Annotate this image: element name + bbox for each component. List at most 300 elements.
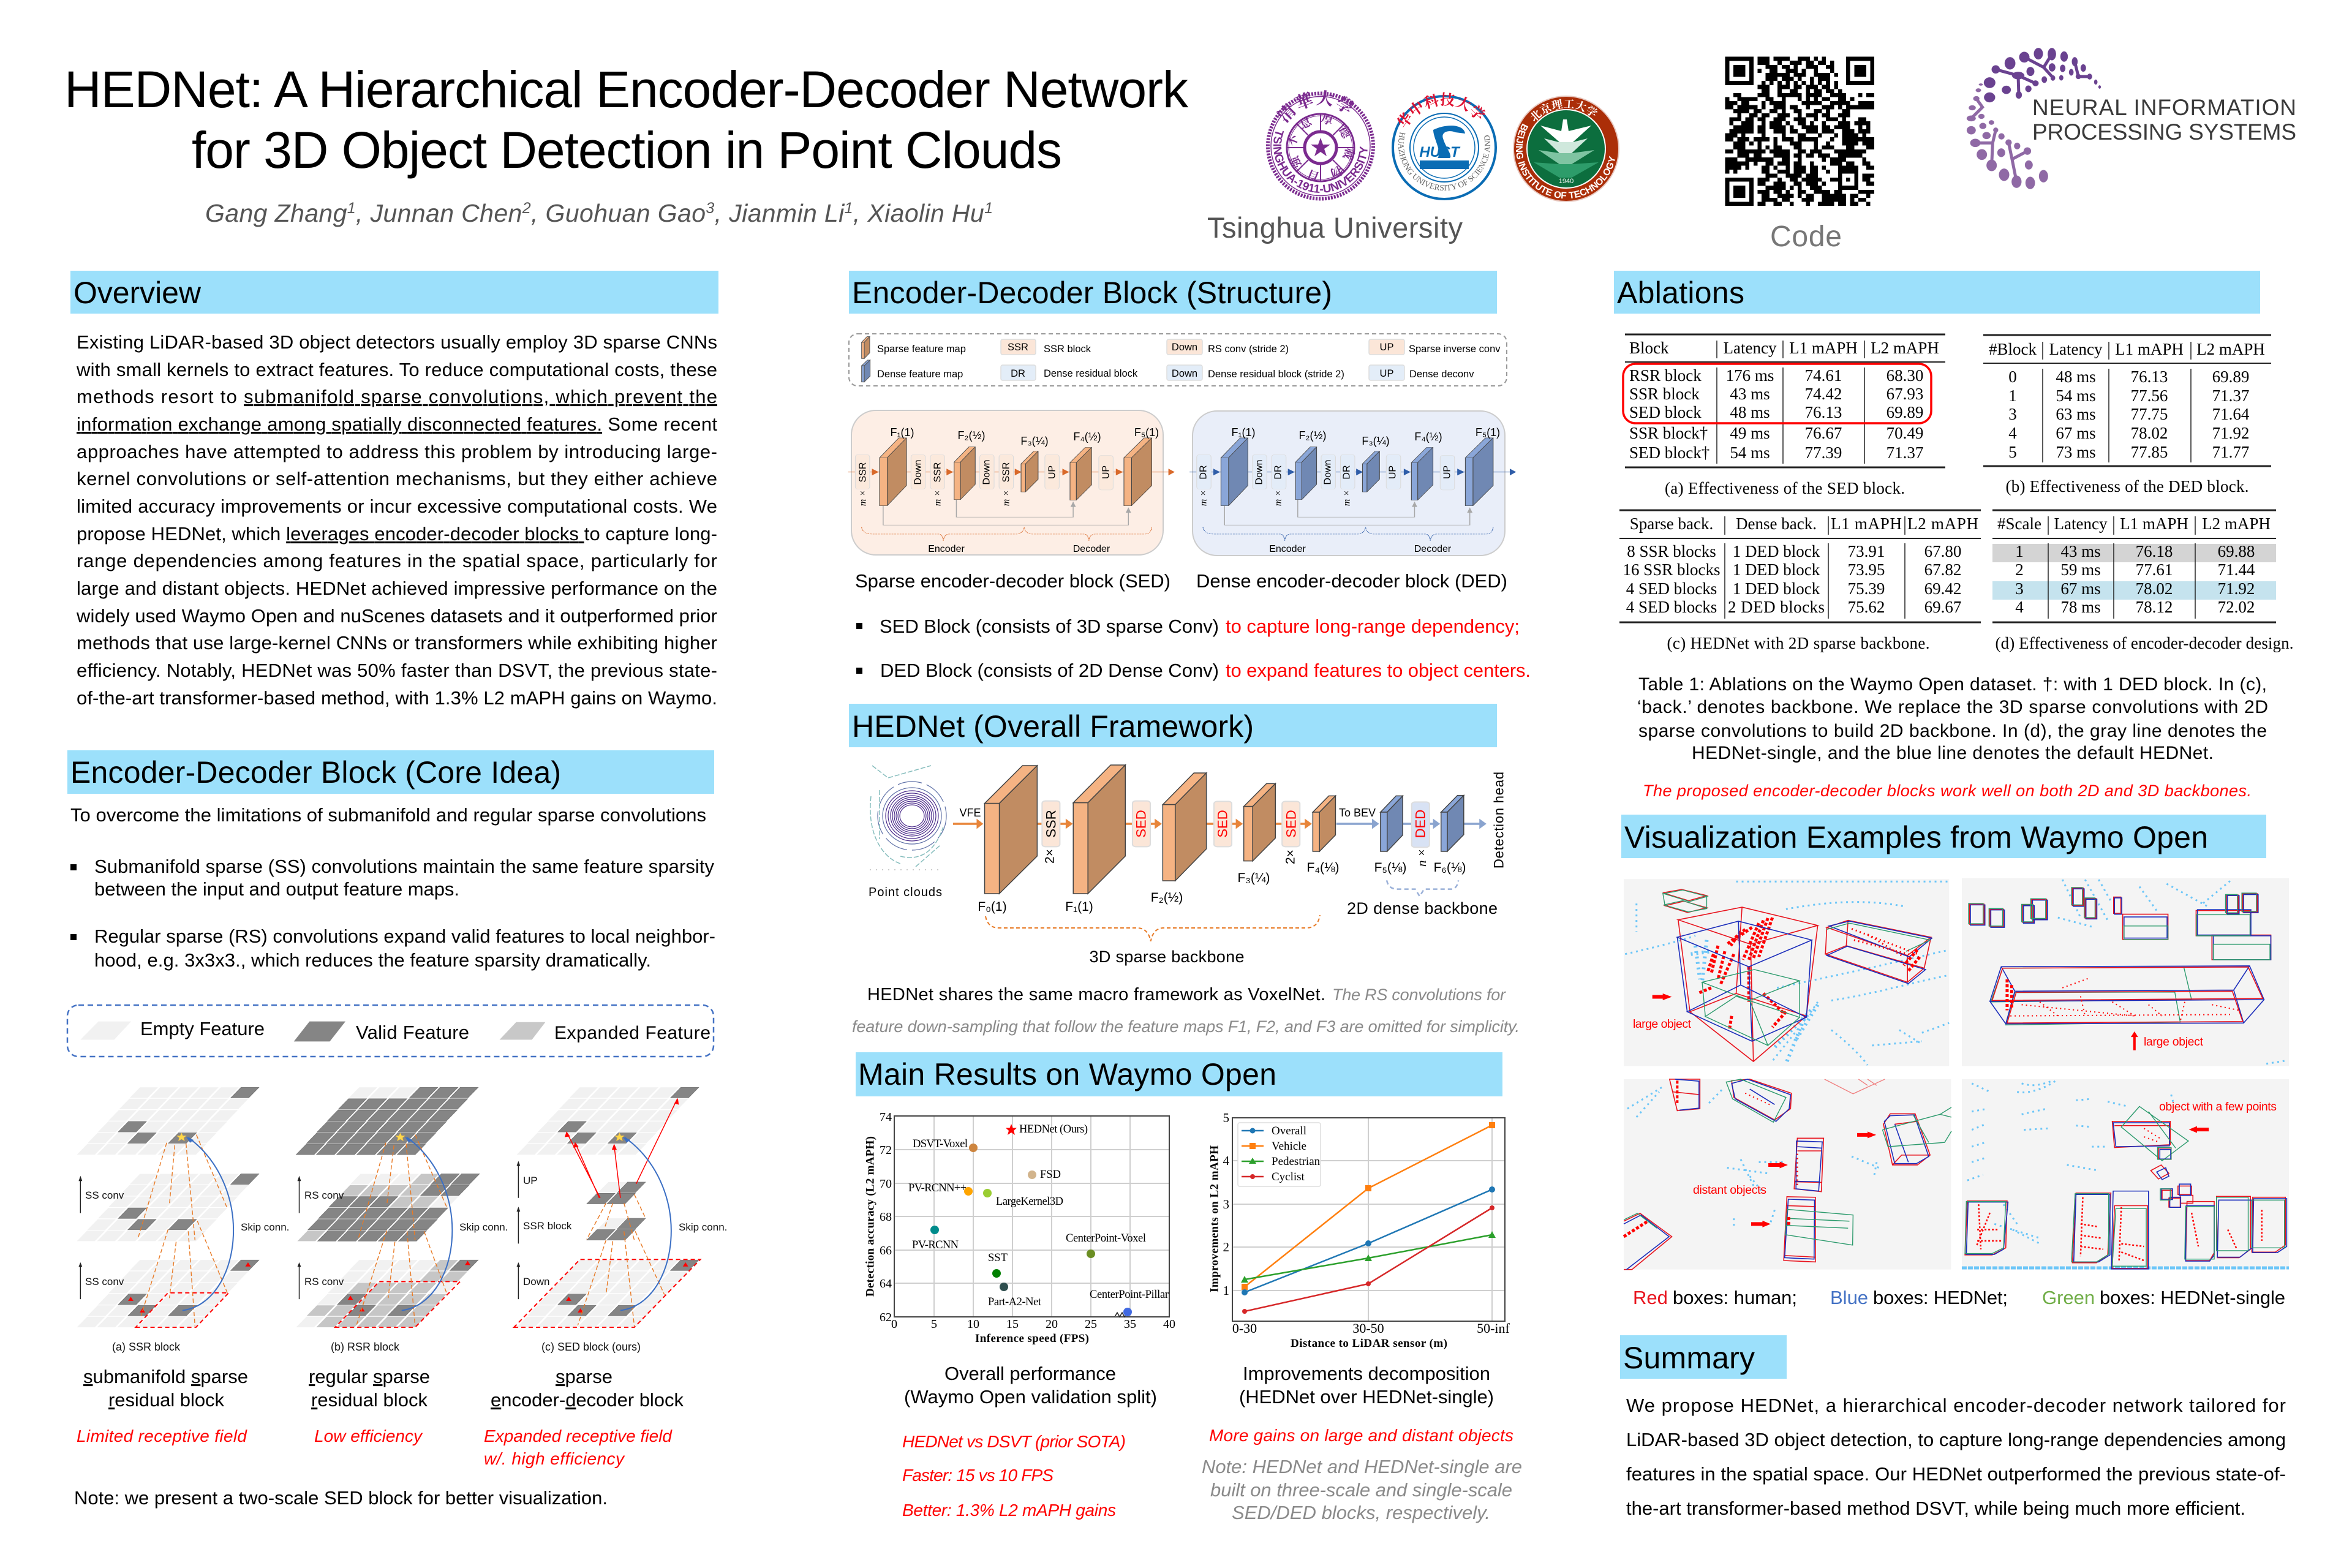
gray note: built on three-scale and single-scale [1210,1479,1512,1501]
pipeline labels: 2D dense backbone [1347,899,1498,918]
framework note: feature down-sampling that follow the feature maps F1, F2, and F3 are omitted for simplicity. [852,1017,1520,1036]
overview body text: efficiency. Notably, HEDNet was 50% faster than DSVT, the previous state- [77,660,717,681]
structure captions [855,570,1507,592]
pipeline labels: SSR [1044,810,1058,838]
table b: DED block: 77.56 [2131,386,2168,405]
chart: improvement by distance: 5 [1223,1110,1229,1125]
chart: accuracy vs speed scatter: 40 [1163,1317,1175,1331]
legend: feature types: Empty Feature [140,1018,265,1039]
logo: Beijing Institute of Technology seal: 1940 [1559,178,1574,185]
diagram: HEDNet pipeline [953,765,1507,966]
logo: HUST seal: 华中科技大学 [1397,92,1486,127]
chart: accuracy vs speed scatter: Part-A2-Net [988,1296,1042,1308]
table d: encoder-decoder design: L2 mAPH [2202,514,2271,533]
table b: DED block: 73 ms [2056,443,2096,461]
panel: main results [856,1052,1522,1523]
diagram labels: (b) RSR block [331,1341,400,1353]
pipeline labels: n × [1414,848,1429,867]
table a: SED block: 74.61 [1805,366,1842,385]
scene annotations: object with a few points [2159,1100,2277,1114]
table b: DED block: 71.37 [2212,386,2249,405]
table c: 2D sparse backbone: 73.91 [1848,542,1885,560]
table d: encoder-decoder design: 72.02 [2218,598,2255,616]
chart: accuracy vs speed scatter: 0 [891,1317,897,1331]
block verdicts [77,1427,673,1468]
table d: encoder-decoder design: 77.61 [2136,560,2173,579]
table d: encoder-decoder design: 76.18 [2136,542,2173,560]
table b: DED block: 69.89 [2212,368,2249,386]
chart: accuracy vs speed scatter: CenterPoint-Voxel [1066,1232,1146,1245]
diagram labels: RS conv [304,1276,344,1287]
gray note: SED/DED blocks, respectively. [1232,1502,1490,1523]
chart: accuracy vs speed scatter: 68 [880,1210,892,1224]
table c: 2D sparse backbone: (c) HEDNet with 2D sparse backbone. [1667,634,1929,652]
table caption: sparse convolutions to build 2D backbone. In (d), the gray line denotes the [1638,721,2267,741]
diagram: sparse encoder-decoder block: F₄(½) [1073,431,1101,443]
authors: 1 [347,200,356,217]
table d: encoder-decoder design: L1 mAPH [2120,514,2188,533]
diagram: dense encoder-decoder block: Decoder [1414,544,1452,554]
red takeaways [902,1426,1513,1520]
diagram: dense encoder-decoder block: DR [1198,465,1209,480]
table a: SED block: SED block [1629,403,1702,421]
structure bullets: to expand features to object centers. [1226,660,1531,681]
pipeline labels: F₀(1) [978,900,1007,914]
block verdicts: Limited receptive field [77,1427,247,1446]
table c: 2D sparse backbone: 2 DED blocks [1728,598,1825,616]
pipeline labels: SED [1133,810,1149,838]
table a: SED block: SED block† [1629,443,1709,462]
diagram: sparse encoder-decoder block: Decoder [1073,544,1110,554]
logo: Tsinghua University seal: 自強不息厚德載物 [1289,113,1355,181]
table d: encoder-decoder design: 67 ms [2060,579,2101,598]
diagram labels: SS conv [85,1276,124,1287]
panel: main results: Main Results on Waymo Open [858,1057,1276,1091]
chart: improvement by distance: 50-inf [1477,1321,1510,1336]
table caption: HEDNet-single, and the blue line denotes the default HEDNet. [1692,743,2214,763]
table a: SED block: 77.39 [1805,443,1842,462]
overview body text: propose HEDNet, which leverages encoder-decoder blocks to capture long- [77,523,717,545]
chart: accuracy vs speed scatter: 35 [1124,1317,1136,1331]
diagram: sparse encoder-decoder block: UP [1047,466,1057,479]
core idea bullets: hood, e.g. 3x3x3., which reduces the feature sparsity dramatically. [94,949,651,971]
chart: improvement by distance: Pedestrian [1272,1155,1321,1168]
diagram: sparse encoder-decoder block: SSR [858,462,869,482]
table a: SED block [1623,334,1945,497]
ablation takeaway: The proposed encoder-decoder blocks work well on both 2D and 3D backbones. [1643,782,2252,800]
chart captions: Improvements decomposition [1243,1363,1490,1384]
pipeline labels: 3D sparse backbone [1089,948,1245,966]
chart: accuracy vs speed scatter: 72 [880,1144,892,1157]
structure bullets: SED Block (consists of 3D sparse Conv) [880,616,1219,637]
table d: encoder-decoder design: #Scale [1997,514,2041,533]
table b: DED block: 77.75 [2131,405,2168,423]
panel: ablations [1614,271,2293,800]
table c: 2D sparse backbone: 16 SSR blocks [1623,560,1721,579]
diagram: sparse encoder-decoder block: m × [932,490,943,506]
chart captions: (HEDNet over HEDNet-single) [1239,1386,1494,1408]
structure legend: UP [1380,368,1393,379]
logo: Beijing Institute of Technology seal: 北京理工大学 [1531,99,1597,121]
table d: encoder-decoder design: 78 ms [2060,598,2101,616]
chart: improvement by distance: 30-50 [1352,1321,1384,1336]
chart: accuracy vs speed scatter [864,1110,1175,1345]
block verdicts: w/. high efficiency [484,1449,625,1468]
gray note: Note: HEDNet and HEDNet-single are [1202,1456,1522,1477]
table d: encoder-decoder design: 1 [2015,542,2024,560]
panel: encoder-decoder structure [848,271,1531,681]
table a: SED block: 67.93 [1887,385,1923,403]
framework note: HEDNet shares the same macro framework as VoxelNet. [867,985,1325,1005]
table d: encoder-decoder design: 71.92 [2218,579,2255,598]
chart: improvement by distance: Cyclist [1272,1170,1305,1183]
logo: HUST seal: HUST [1419,144,1461,160]
table c: 2D sparse backbone: 67.80 [1924,542,1961,560]
structure legend: Dense residual block (stride 2) [1208,369,1344,380]
table b: DED block: 77.85 [2131,443,2168,461]
table d: encoder-decoder design: 71.44 [2218,560,2255,579]
table a: SED block: 76.67 [1805,424,1842,442]
authors: 1 [984,200,993,217]
diagram: sparse encoder-decoder block: SSR [1001,462,1012,482]
table d: encoder-decoder design: 4 [2015,598,2024,616]
pipeline labels: F₁(1) [1065,900,1093,914]
chart: improvement by distance: 1 [1223,1283,1229,1298]
pipeline labels: VFE [959,807,981,819]
table b: DED block: 5 [2008,443,2017,461]
pipeline labels: SED [1215,810,1230,838]
diagram: dense encoder-decoder block: m × [1341,490,1352,506]
diagram: sparse encoder-decoder block: F₅(1) [1134,426,1159,439]
box color legend: boxes: HEDNet-single [2100,1287,2285,1308]
point cloud icon [869,766,946,899]
block verdicts: Low efficiency [314,1427,423,1446]
red takeaways: Better: 1.3% L2 mAPH gains [902,1501,1116,1520]
diagram: dense encoder-decoder block: F₅(1) [1476,426,1500,439]
chart: accuracy vs speed scatter: 20 [1046,1317,1058,1331]
scene: large truck close-up [1624,879,1949,1066]
overview body text: with small kernels to extract features. To reduce computational costs, these [76,359,717,380]
table c: 2D sparse backbone: 67.82 [1924,560,1961,579]
table a: SED block: Block [1629,339,1669,357]
scene annotations: distant objects [1693,1183,1766,1197]
scene annotations: large object [2144,1035,2204,1049]
diagram: dense encoder-decoder block: Encoder [1269,544,1306,554]
table b: DED block: (b) Effectiveness of the DED block. [2005,477,2249,496]
scene annotations [1633,1017,2277,1197]
table d: encoder-decoder design: 69.88 [2218,542,2255,560]
table b: DED block: L2 mAPH [2196,340,2265,358]
block names: encoder-decoder block [491,1389,684,1411]
pipeline labels: To BEV [1339,807,1376,819]
structure bullets: DED Block (consists of 2D Dense Conv) [880,660,1219,681]
table b: DED block: 48 ms [2056,368,2096,386]
point cloud icon: Point clouds [869,886,942,899]
table a: SED block: 49 ms [1730,424,1770,442]
table caption [1637,674,2268,763]
table a: SED block: L1 mAPH [1789,339,1858,357]
diagram labels: Down [523,1276,549,1287]
table b: DED block: 54 ms [2056,386,2096,405]
diagram: dense encoder-decoder block: Down [1254,460,1264,484]
box color legend: Green [2042,1287,2095,1308]
diagram: dense encoder-decoder block: UP [1442,466,1453,479]
title: for 3D Object Detection in Point Clouds [192,121,1062,179]
table d: encoder-decoder design: 59 ms [2060,560,2101,579]
diagram: sparse encoder-decoder block [848,410,1175,555]
box color legend: Blue [1830,1287,1868,1308]
red takeaways: More gains on large and distant objects [1209,1426,1513,1445]
logo: Tsinghua University seal: TSINGHUA-1911-UNIVERSITY [1273,131,1368,193]
summary body: LiDAR-based 3D object detection, to capture long-range dependencies among [1626,1429,2286,1450]
pipeline labels [959,772,1507,966]
table b: DED block: 71.64 [2212,405,2250,423]
diagram: dense encoder-decoder block: m × [1198,490,1209,506]
diagram: sparse encoder-decoder block: Encoder [928,544,965,554]
diagram: dense encoder-decoder block: DR [1341,465,1352,480]
legend: feature types: Expanded Feature [554,1023,710,1043]
table b: DED block: Latency [2049,340,2103,358]
summary body: the-art transformer-based method DSVT, while being much more efficient. [1626,1498,2245,1519]
panel: overview: Overview [74,276,202,310]
structure bullets: to capture long-range dependency; [1226,616,1520,637]
table c: 2D sparse backbone: L2 mAPH [1907,514,1978,533]
table caption: ‘back.’ denotes backbone. We replace the 3D sparse convolutions with 2D [1637,697,2268,717]
table d: encoder-decoder design: 2 [2015,560,2024,579]
authors: , Xiaolin Hu [853,199,984,227]
authors: , Guohuan Gao [531,199,706,227]
chart: accuracy vs speed scatter: 66 [880,1244,892,1257]
structure legend: DR [1011,368,1025,379]
diagram: sparse encoder-decoder block: m × [858,490,869,506]
overview body text: kernel convolutions or self-attention mechanisms, but they either achieve [77,468,717,489]
authors: , Jianmin Li [715,199,845,227]
table a: SED block: 176 ms [1726,366,1774,385]
table c: 2D sparse backbone: 1 DED block [1733,579,1820,598]
scene: few-point object [1962,1079,2289,1270]
table d: encoder-decoder design: 43 ms [2060,542,2101,560]
diagram: sparse encoder-decoder block: F₁(1) [890,426,914,439]
panel: visualization examples [1621,815,2289,1308]
block names: regular sparse [309,1366,430,1387]
structure legend [849,334,1507,386]
table caption: Table 1: Ablations on the Waymo Open dataset. †: with 1 DED block. In (c), [1638,674,2267,695]
diagram labels: (a) SSR block [112,1341,181,1353]
chart: accuracy vs speed scatter: DSVT-Voxel [913,1138,968,1150]
table a: SED block: 54 ms [1730,443,1770,462]
diagram labels: SS conv [85,1189,124,1201]
table a: SED block: SSR block [1629,385,1700,403]
table d: encoder-decoder design: (d) Effectiveness of encoder-decoder design. [1996,634,2293,652]
table b: DED block: 76.13 [2131,368,2168,386]
chart: improvement by distance: 3 [1223,1197,1229,1212]
block names: sparse [556,1366,612,1387]
pipeline labels: DED [1412,810,1428,838]
table a: SED block: 76.13 [1805,403,1842,421]
logo: NeurIPS: NEURAL INFORMATION [2032,95,2296,120]
logo: Tsinghua University seal [1266,90,1375,201]
table c: 2D sparse backbone [1619,510,1981,652]
table c: 2D sparse backbone: 69.67 [1924,598,1961,616]
block names: submanifold sparse [83,1366,248,1387]
QR code [1725,59,1874,204]
diagram labels: UP [523,1175,538,1186]
scene annotations: large object [1633,1017,1692,1031]
box color legend: boxes: human; [1673,1287,1797,1308]
structure legend: Dense deconv [1409,369,1474,380]
panel: encoder-decoder structure: Encoder-Decoder Block (Structure) [852,276,1332,310]
table b: DED block: 71.77 [2212,443,2249,461]
framework note: The RS convolutions for [1332,986,1506,1004]
structure legend: RS conv (stride 2) [1208,344,1289,355]
diagram: SSR block [77,1087,259,1327]
structure legend: SSR [1008,342,1028,353]
chart: accuracy vs speed scatter: LargeKernel3D [996,1196,1063,1208]
table d: encoder-decoder design: 78.02 [2136,579,2173,598]
chart: improvement by distance [1208,1110,1510,1350]
pipeline labels: F₄(⅛) [1307,861,1339,875]
table c: 2D sparse backbone: 75.62 [1848,598,1885,616]
panel: encoder-decoder core idea [67,750,715,971]
note on two-scale block: Note: we present a two-scale SED block for better visualization. [74,1487,608,1509]
chart: improvement by distance: 4 [1223,1153,1230,1168]
core idea bullets: Regular sparse (RS) convolutions expand valid features to local neighbor- [94,925,715,947]
table b: DED block: 0 [2008,368,2017,386]
diagram labels: (c) SED block (ours) [541,1341,641,1353]
structure legend: UP [1380,342,1393,353]
table b: DED block: 4 [2008,424,2017,442]
legend: feature types [67,1005,714,1057]
table d: encoder-decoder design: 3 [2015,579,2024,598]
structure legend: SSR block [1044,344,1091,355]
chart: improvement by distance: Improvements on L2 mAPH [1208,1145,1221,1292]
block names [83,1366,684,1411]
overview body text: approaches have attempted to address this problem by introducing large- [77,441,717,462]
diagram: sparse encoder-decoder block: Down [981,460,992,484]
table c: 2D sparse backbone: 1 DED block [1733,560,1820,579]
overview body text: information exchange among spatially disconnected features. Some recent [77,413,717,435]
diagram: dense encoder-decoder block: F₄(½) [1414,431,1442,443]
scene: distant objects [1624,1079,1951,1270]
structure bullets [856,616,1531,681]
pipeline labels: Detection head [1491,772,1507,869]
diagram: dense encoder-decoder block: Down [1323,460,1333,484]
chart: accuracy vs speed scatter: PV-RCNN [912,1239,959,1251]
block verdicts: Expanded receptive field [484,1427,673,1446]
table c: 2D sparse backbone: 75.39 [1848,579,1885,598]
core idea intro text: To overcome the limitations of submanifold and regular sparse convolutions [70,804,706,826]
pipeline labels: SED [1284,810,1298,838]
structure legend: Sparse inverse conv [1409,344,1501,355]
title [64,61,1189,179]
table c: 2D sparse backbone: 69.42 [1924,579,1961,598]
box color legend [1633,1287,2285,1308]
table c: 2D sparse backbone: 8 SSR blocks [1627,542,1716,560]
diagram: sparse encoder-decoder block: F₃(¼) [1020,435,1049,447]
table c: 2D sparse backbone: Dense back. [1736,514,1817,533]
chart: accuracy vs speed scatter: HEDNet (Ours) [1019,1123,1088,1136]
box color legend: boxes: HEDNet; [1873,1287,2008,1308]
table b: DED block: 3 [2008,405,2017,423]
diagram: sparse block comparison [77,1087,727,1353]
overview body text: limited accuracy improvements or incur excessive computational costs. We [77,496,717,517]
logo: HUST seal [1392,92,1497,200]
block names: residual block [311,1389,428,1411]
table a: SED block: L2 mAPH [1871,339,1939,357]
table c: 2D sparse backbone: 4 SED blocks [1626,598,1717,616]
table c: 2D sparse backbone: L1 mAPH [1831,514,1902,533]
pipeline labels: F₂(½) [1151,891,1183,905]
diagram: dense encoder-decoder block: m × [1273,490,1284,506]
red takeaways: HEDNet vs DSVT (prior SOTA) [902,1432,1126,1451]
logo: Tsinghua University seal: 清華大學 [1276,90,1354,123]
table b: DED block: 67 ms [2056,424,2096,442]
chart: accuracy vs speed scatter: CenterPoint-Pillar [1090,1289,1169,1301]
authors: 1 [845,200,853,217]
chart: improvement by distance: Overall [1272,1125,1306,1137]
box color legend: Red [1633,1287,1668,1308]
diagram: RSR block [296,1087,480,1327]
diagram: sparse encoder-decoder block: SSR [932,462,943,482]
table d: encoder-decoder design [1992,510,2293,652]
table a: SED block: 74.42 [1805,385,1842,403]
table c: 2D sparse backbone: 4 SED blocks [1626,579,1717,598]
chart: improvement by distance: Vehicle [1272,1140,1306,1153]
diagram: dense encoder-decoder block [1189,411,1516,556]
table a: SED block: 71.37 [1887,443,1923,462]
table b: DED block: 78.02 [2131,424,2168,442]
legend: feature types: Valid Feature [356,1022,469,1043]
pipeline labels: 2× [1042,849,1057,864]
scene: long vehicle [1962,878,2289,1066]
diagram labels: Skip conn. [679,1221,727,1233]
diagram: SED block [514,1087,700,1327]
chart: accuracy vs speed scatter: Inference speed (FPS) [975,1332,1089,1345]
diagram: sparse encoder-decoder block: F₂(½) [958,429,985,442]
chart: improvement by distance: 2 [1223,1240,1229,1254]
diagram: dense encoder-decoder block: F₁(1) [1231,426,1256,439]
panel: ablations: Ablations [1617,276,1744,310]
chart: accuracy vs speed scatter: 15 [1006,1317,1019,1331]
panel: overall framework [849,704,1520,1036]
overview body text [76,331,717,709]
core idea bullets: Submanifold sparse (SS) convolutions maintain the same feature sparsity [94,856,714,877]
core idea bullets: between the input and output feature maps. [94,878,459,900]
table d: encoder-decoder design: 78.12 [2136,598,2173,616]
diagram: sparse encoder-decoder block: m × [1001,490,1012,506]
logo: Beijing Institute of Technology seal: BEIJING INSTITUTE OF TECHNOLOGY [1516,124,1615,198]
pipeline labels: F₃(¼) [1238,871,1270,885]
diagram labels: Skip conn. [241,1221,289,1233]
diagram labels [85,1175,727,1353]
diagram: sparse encoder-decoder block: UP [1101,466,1111,479]
chart: accuracy vs speed scatter: 64 [880,1277,892,1291]
panel: encoder-decoder core idea: Encoder-Decoder Block (Core Idea) [70,755,561,790]
overview body text: methods resort to submanifold sparse convolutions, which prevent the [77,386,717,407]
structure legend: Sparse feature map [877,344,966,355]
logo: NeurIPS: PROCESSING SYSTEMS [2032,119,2296,145]
title: HEDNet: A Hierarchical Encoder-Decoder Network [64,61,1189,118]
table b: DED block: L1 mAPH [2115,340,2184,358]
university name: Tsinghua University [1207,211,1463,244]
chart: accuracy vs speed scatter: FSD [1040,1169,1061,1181]
table a: SED block: 48 ms [1730,403,1770,421]
pipeline labels: 2× [1284,850,1297,864]
table a: SED block: 68.30 [1887,366,1923,385]
chart: accuracy vs speed scatter: 10 [967,1317,979,1331]
structure captions: Sparse encoder-decoder block (SED) [855,570,1170,592]
chart: accuracy vs speed scatter: 62 [880,1311,892,1324]
